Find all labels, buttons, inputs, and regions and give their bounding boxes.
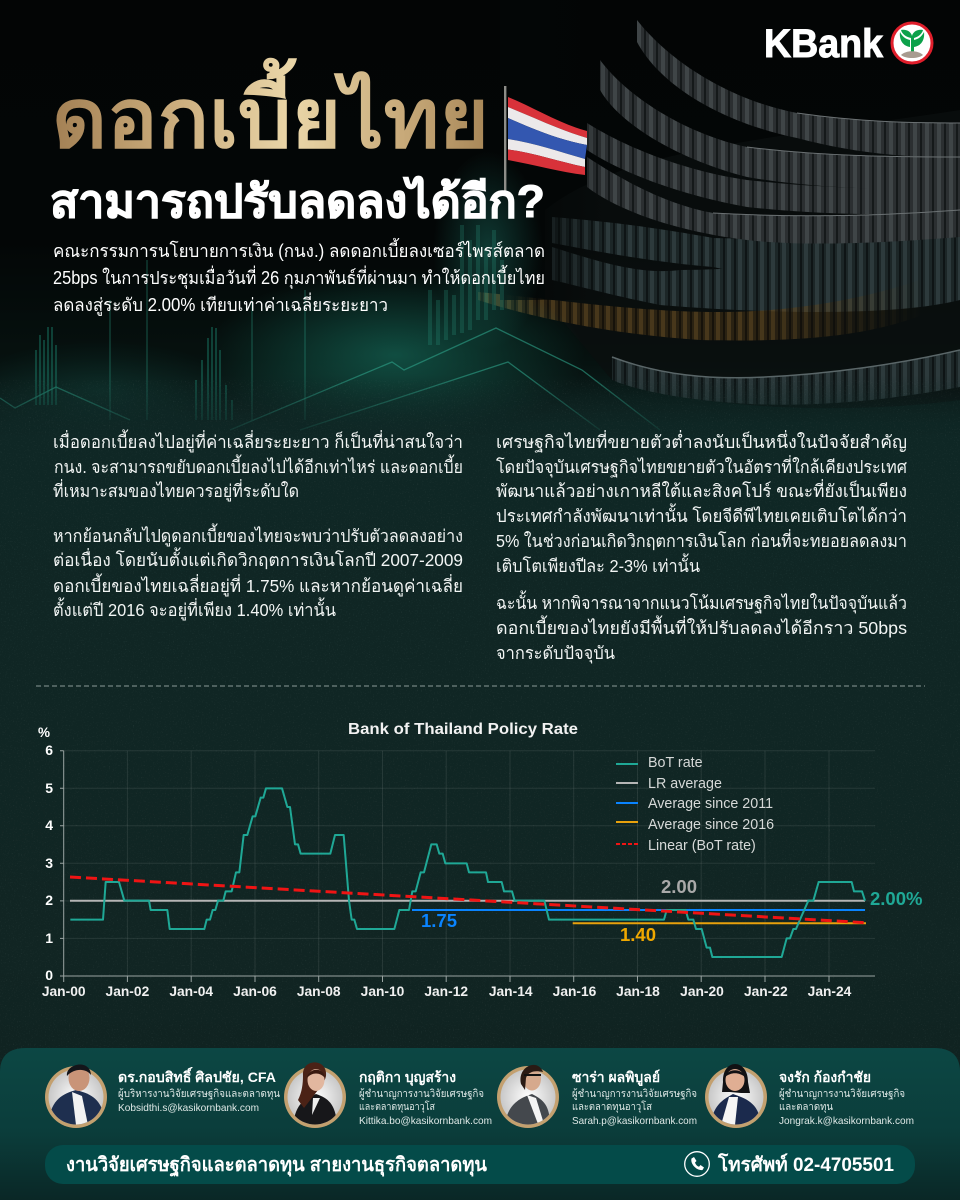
series: LR average	[70, 900, 865, 902]
value label: 1.40: 1.40	[620, 924, 656, 945]
series: average since 2011	[412, 909, 865, 911]
y axis labels: 1	[45, 930, 53, 946]
x axis labels: Jan-24	[808, 984, 852, 999]
panel: footer	[0, 1048, 960, 1200]
body text: right column: 5% ในช่วงก่อนเกิดวิกฤตการเงินโลก ก่อนที่จะทยอยลดลงมา	[496, 529, 907, 551]
legend: Average since 2016	[648, 817, 774, 833]
series: average since 2016	[573, 922, 866, 924]
analyst 3: ผู้ชำนาญการงานวิจัยเศรษฐกิจ	[572, 1088, 697, 1100]
analyst 1: ดร.กอบสิทธิ์ ศิลปชัย, CFA	[118, 1066, 276, 1085]
intro text: 25bps ในการประชุมเมื่อวันที่ 26 กุมภาพันธ์ที่ผ่านมา ทำให้ดอกเบี้ยไทย	[53, 265, 545, 289]
coin stack illustration	[478, 0, 960, 408]
body text: right column: จากระดับปัจจุบัน	[496, 643, 615, 664]
green market chart backdrop	[0, 150, 960, 445]
contact bar: งานวิจัยเศรษฐกิจและตลาดทุน สายงานธุรกิจตลาดทุน	[66, 1154, 488, 1178]
x axis labels: Jan-18	[616, 984, 660, 999]
analyst 1: ผู้บริหารงานวิจัยเศรษฐกิจและตลาดทุน	[118, 1088, 280, 1100]
logo: KBank: KBank	[764, 22, 884, 66]
series: linear trend	[70, 877, 866, 923]
x axis labels: Jan-06	[233, 984, 277, 999]
body text: right column: พัฒนาแล้วอย่างเกาหลีใต้และสิงคโปร์ ขณะที่ยังเป็นเพียง	[496, 479, 907, 501]
title: white line: สามารถปรับลดลงได้อีก?	[50, 175, 545, 227]
analyst 4: ผู้ชำนาญการงานวิจัยเศรษฐกิจ	[779, 1088, 905, 1100]
body text: right column: เศรษฐกิจไทยที่ขยายตัวต่ำลงนับเป็นหนึ่งในปัจจัยสำคัญ	[496, 430, 907, 453]
body text: left column: ตั้งแต่ปี 2016 จะอยู่ที่เพียง 1.40% เท่านั้น	[53, 597, 336, 621]
speckle texture	[0, 380, 960, 1200]
y axis labels: 3	[45, 855, 53, 871]
analyst 2	[284, 1062, 492, 1128]
intro text	[53, 238, 545, 316]
body text: left column: ต่อเนื่อง โดยนับตั้งแต่เกิดวิกฤตการเงินโลกปี 2007-2009	[53, 547, 463, 570]
x axis labels: Jan-02	[106, 984, 150, 999]
contact bar	[45, 1145, 915, 1184]
x axis labels: Jan-00	[42, 984, 86, 999]
analyst 4	[705, 1064, 914, 1128]
series: BoT rate	[70, 788, 865, 957]
chart title: Bank of Thailand Policy Rate	[348, 721, 578, 738]
x axis labels: Jan-22	[744, 984, 788, 999]
body text: right column: ประเทศกำลังพัฒนาเท่านั้น โดยจีดีพีไทยเคยเติบโตได้กว่า	[496, 503, 907, 526]
icon: KBank leaf emblem	[892, 23, 932, 63]
title: gold line: ดอกเบี้ยไทย	[52, 57, 489, 165]
analyst 2: กฤติกา บุญสร้าง	[359, 1069, 456, 1086]
chart: Bank of Thailand Policy Rate	[38, 721, 922, 999]
y axis labels: 2	[45, 892, 53, 908]
y axis labels: 5	[45, 780, 53, 796]
body text: left column: หากย้อนกลับไปดูดอกเบี้ยของไทยจะพบว่าปรับตัวลดลงอย่าง	[53, 523, 463, 547]
x axis labels: Jan-04	[169, 984, 213, 999]
x axis labels	[42, 984, 852, 999]
analyst 3: ซาร่า ผลพิบูลย์	[572, 1069, 660, 1086]
x axis labels: Jan-16	[553, 984, 597, 999]
analyst 3: และตลาดทุนอาวุโส	[572, 1100, 653, 1113]
chart axes	[60, 751, 875, 982]
body text: right column: ดอกเบี้ยของไทยยังมีพื้นที่ให้ปรับลดลงได้อีกราว 50bps	[496, 615, 907, 638]
icon: telephone	[685, 1152, 709, 1176]
legend: Average since 2011	[648, 796, 773, 812]
body text: left column	[53, 429, 463, 621]
value label: 1.75: 1.75	[421, 910, 457, 931]
analyst 2: และตลาดทุนอาวุโส	[359, 1100, 435, 1113]
analyst 3: Sarah.p@kasikornbank.com	[572, 1115, 697, 1127]
analyst 1: Kobsidthi.s@kasikornbank.com	[118, 1102, 259, 1114]
intro text: ลดลงสู่ระดับ 2.00% เทียบเท่าค่าเฉลี่ยระยะยาว	[53, 292, 388, 316]
body text: left column: เมื่อดอกเบี้ยลงไปอยู่ที่ค่าเฉลี่ยระยะยาว ก็เป็นที่น่าสนใจว่า	[53, 429, 463, 453]
analyst 2: Kittika.bo@kasikornbank.com	[359, 1115, 492, 1127]
x axis labels: Jan-12	[424, 984, 468, 999]
analyst 3	[497, 1065, 697, 1128]
analyst 4: Jongrak.k@kasikornbank.com	[779, 1115, 914, 1127]
body text: left column: กนง. จะสามารถขยับดอกเบี้ยลงไปได้อีกเท่าไหร่ และดอกเบี้ย	[54, 454, 463, 477]
x axis labels: Jan-10	[361, 984, 405, 999]
analyst 2: ผู้ชำนาญการงานวิจัยเศรษฐกิจ	[359, 1088, 484, 1100]
icon: Thai flag	[504, 86, 587, 192]
value label: 2.00: 2.00	[661, 876, 697, 897]
body text: right column	[496, 430, 907, 664]
analyst 4: จงรัก ก้องกำชัย	[779, 1069, 871, 1085]
body text: right column: โดยปัจจุบันเศรษฐกิจไทยขยายตัวในอัตราที่ใกล้เคียงประเทศ	[496, 455, 907, 478]
y axis labels: 0	[45, 967, 53, 983]
legend: Linear (BoT rate)	[648, 838, 756, 854]
y axis labels: 6	[45, 742, 53, 758]
body text: right column: เติบโตเพียงปีละ 2-3% เท่านั้น	[496, 553, 700, 576]
y axis labels: %	[38, 725, 50, 740]
analyst 1	[45, 1064, 280, 1128]
body text: right column: ฉะนั้น หากพิจารณาจากแนวโน้มเศรษฐกิจไทยในปัจจุบันแล้ว	[496, 590, 907, 614]
x axis labels: Jan-20	[680, 984, 724, 999]
x axis labels: Jan-14	[489, 984, 533, 999]
intro text: คณะกรรมการนโยบายการเงิน (กนง.) ลดดอกเบี้ยลงเซอร์ไพรส์ตลาด	[53, 238, 545, 261]
body text: left column: ที่เหมาะสมของไทยควรอยู่ที่ระดับใด	[53, 479, 299, 502]
contact bar: โทรศัพท์ 02-4705501	[717, 1153, 894, 1176]
body text: left column: ดอกเบี้ยของไทยเฉลี่ยอยู่ที่ 1.75% และหากย้อนดูค่าเฉลี่ย	[53, 573, 463, 597]
legend: LR average	[648, 776, 722, 792]
legend	[616, 755, 774, 854]
legend: BoT rate	[648, 755, 703, 771]
analyst 4: และตลาดทุน	[779, 1101, 833, 1113]
y axis labels: 4	[45, 817, 53, 833]
x axis labels: Jan-08	[297, 984, 341, 999]
value label: 2.00%: 2.00%	[870, 888, 922, 909]
y axis labels	[38, 725, 53, 983]
